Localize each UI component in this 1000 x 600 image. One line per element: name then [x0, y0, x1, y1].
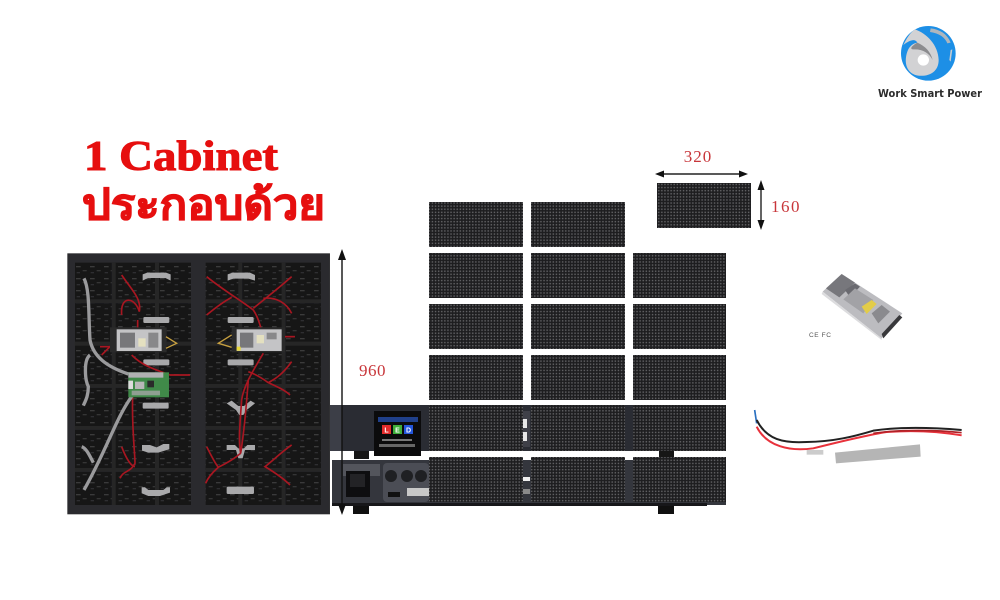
power socket [343, 464, 380, 497]
wiring harness [755, 410, 962, 463]
dimension: 320 [655, 147, 748, 178]
power supply unit [822, 274, 902, 340]
dimension: 160: 160 [771, 197, 801, 216]
control knobs [383, 463, 429, 502]
red wires [100, 275, 295, 485]
title: 1 Cabinet: 1 Cabinet [84, 134, 278, 180]
LED processor front unit [330, 405, 726, 459]
LED processor rear unit [332, 460, 726, 514]
brackets [142, 273, 255, 496]
LED module grid [429, 202, 726, 502]
logo: Work Smart Power [878, 26, 983, 100]
processor display: L [384, 428, 389, 434]
certification marks: CE FC [809, 332, 832, 339]
dimension: 160 [758, 180, 801, 230]
dimension: 320: 320 [684, 147, 712, 166]
cabinet rear view [67, 253, 330, 514]
logo mark [901, 26, 956, 81]
dimension: 960: 960 [359, 361, 386, 380]
ribbon cables [82, 278, 132, 490]
receiving card [128, 372, 169, 397]
processor display: D [406, 428, 411, 434]
left power supply [110, 327, 177, 352]
title: Thai subtitle: ประกอบด้วย [82, 183, 325, 229]
logo: Work Smart Power: Work Smart Power [878, 87, 983, 100]
processor display: E [395, 428, 400, 434]
dimension: 960 [338, 249, 386, 515]
processor display [374, 411, 421, 456]
single LED module [657, 183, 751, 228]
right power supply [218, 327, 285, 352]
